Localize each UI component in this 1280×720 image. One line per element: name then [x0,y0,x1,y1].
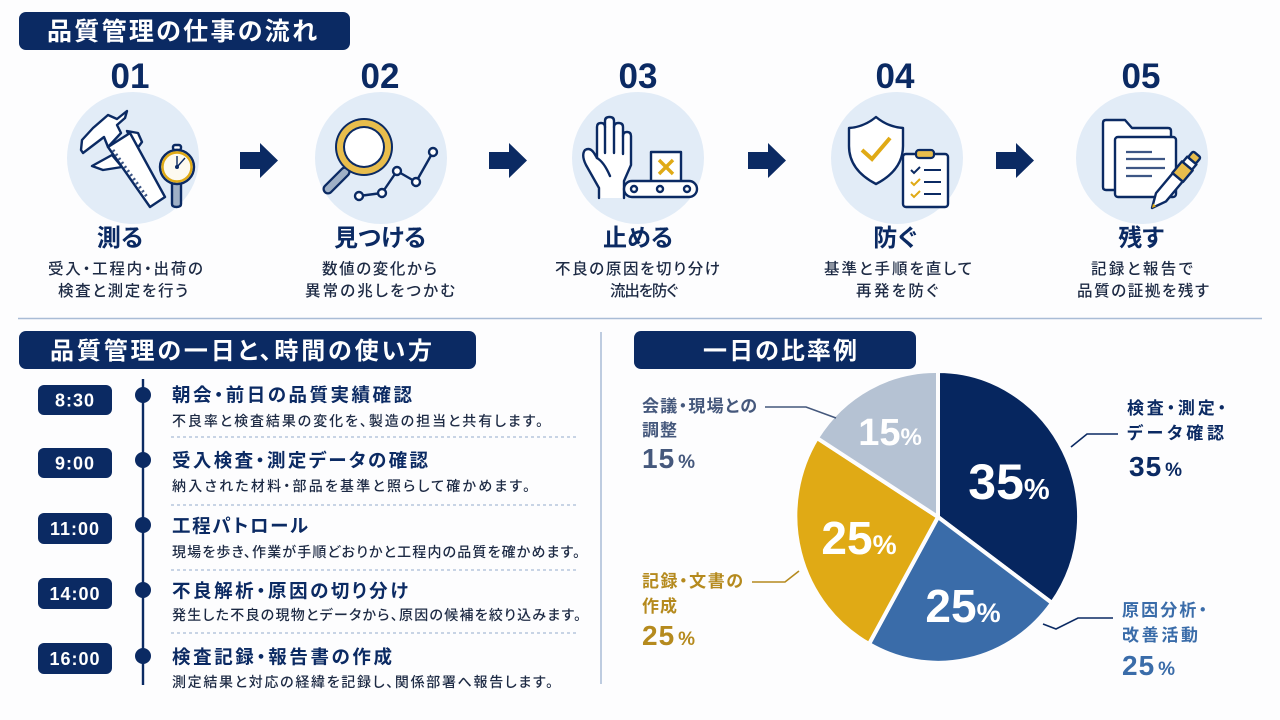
schedule item 9:00: 納入された材料・部品を基準と照らして確かめます。 [172,478,530,494]
callout: inspection 35%: 検査・測定・ [1127,399,1226,418]
pie chart: 25% [925,580,1001,632]
callout: analysis 25%: 改善活動 [1122,625,1198,645]
schedule item 11:00 [38,513,580,560]
step 02: find: 異常の兆しをつかむ [305,282,455,300]
callout: documents 25%: 作成 [642,596,677,616]
arrow 3 [748,143,786,178]
step 05: record: 残す [1118,224,1164,252]
schedule item 11:00: 現場を歩き、作業が手順どおりかと工程内の品質を確かめます。 [172,544,580,560]
schedule item 11:00: 11:00 [50,519,100,539]
callout: meetings 15%: 15% [642,443,696,474]
schedule item 9:00: 9:00 [55,454,95,474]
step 01: measure: 測る [97,225,143,252]
icon: folder, document and pen [1103,120,1202,212]
schedule item 14:00: 発生した不良の現物とデータから、原因の候補を絞り込みます。 [172,607,581,623]
callout: analysis 25% [1043,600,1207,681]
schedule item 8:30: 8:30 [55,390,95,410]
heading: daily ratio [634,331,916,369]
pie chart [795,371,1079,663]
arrow 2 [489,143,527,178]
step 04: prevent: 防ぐ [873,225,917,252]
arrow 1 [240,143,278,178]
step 05: record [1076,57,1209,300]
callout: documents 25%: 記録・文書の [642,571,743,591]
schedule item 9:00: 受入検査・測定データの確認 [172,450,428,471]
step 03: stop: 不良の原因を切り分け [555,260,720,278]
step 01: measure [48,57,203,300]
heading: daily ratio: 一日の比率例 [703,338,857,365]
step 03: stop [555,57,720,300]
step 01: measure: 01 [111,57,149,96]
step 01: measure: 検査と測定を行う [58,282,188,300]
schedule item 11:00: 工程パトロール [172,516,308,536]
step 01: measure: 受入・工程内・出荷の [48,259,203,278]
step 03: stop: 流出を防ぐ [610,282,679,300]
callout: meetings 15%: 会議・現場との [642,397,757,416]
timeline [38,379,581,690]
schedule item 9:00 [38,448,530,494]
schedule item 8:30: 朝会・前日の品質実績確認 [172,384,412,406]
heading: workflow [19,12,350,50]
callout: inspection 35% [1071,399,1226,482]
step 02: find [305,57,455,300]
step 04: prevent [824,57,972,300]
step 04: prevent: 04 [876,57,915,96]
callout: meetings 15%: 調整 [642,421,677,440]
callout: inspection 35%: 35% [1129,451,1183,482]
icon: shield and checklist [849,117,948,207]
pie chart: 15% [858,412,922,454]
pie chart: 25% [821,512,897,564]
step 05: record: 記録と報告で [1091,260,1193,278]
callout: documents 25%: 25% [642,620,696,651]
schedule item 16:00 [38,643,553,690]
schedule item 14:00 [38,578,581,623]
schedule item 8:30 [38,384,543,429]
schedule item 16:00: 16:00 [49,649,101,669]
pie chart: 35% [968,454,1050,510]
heading: daily schedule: 品質管理の一日と、時間の使い方 [50,338,432,365]
step 04: prevent: 基準と手順を直して [824,260,972,278]
heading: workflow: 品質管理の仕事の流れ [47,18,317,46]
callout: meetings 15% [642,397,836,474]
arrow 4 [996,143,1034,178]
step 04: prevent: 再発を防ぐ [856,282,939,300]
callout: analysis 25%: 25% [1122,650,1176,681]
schedule item 16:00: 検査記録・報告書の作成 [172,646,392,668]
icon: stop hand and conveyor [583,117,697,198]
step 03: stop: 03 [619,57,657,96]
schedule item 8:30: 不良率と検査結果の変化を、製造の担当と共有します。 [172,413,543,429]
step 05: record: 品質の証拠を残す [1077,281,1209,300]
step 03: stop: 止める [603,225,673,252]
step 02: find: 見つける [334,225,426,252]
schedule item 14:00: 不良解析・原因の切り分け [172,580,408,602]
icon: caliper and dial gauge [81,111,194,207]
step 02: find: 数値の変化から [322,260,437,278]
step 02: find: 02 [361,57,399,96]
callout: inspection 35%: データ確認 [1127,423,1224,443]
heading: daily schedule [19,331,476,369]
step 05: record: 05 [1122,57,1160,96]
icon: magnifier and trend line [328,118,437,200]
schedule item 14:00: 14:00 [49,584,101,604]
callout: analysis 25%: 原因分析・ [1122,600,1207,620]
schedule item 16:00: 測定結果と対応の経緯を記録し、関係部署へ報告します。 [172,674,553,690]
callout: documents 25% [642,571,799,651]
